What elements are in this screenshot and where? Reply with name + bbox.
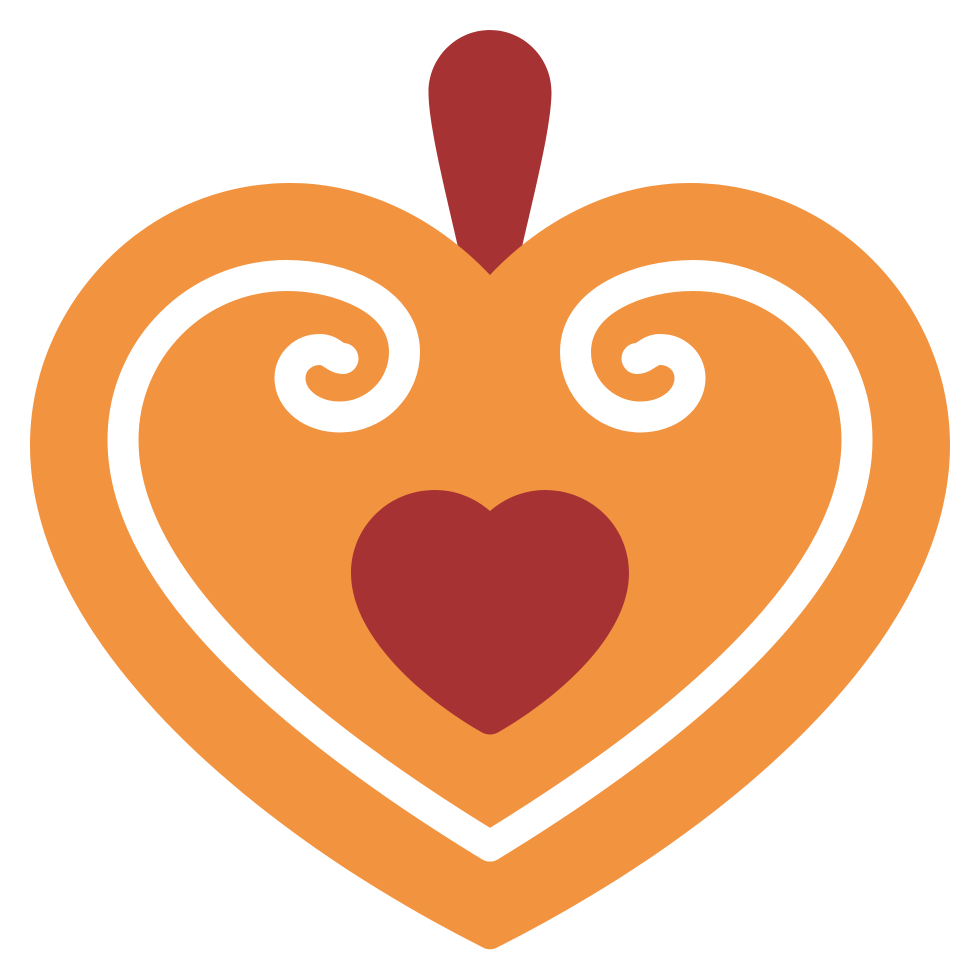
right icing line and swirl <box>490 276 857 846</box>
left icing line and swirl <box>123 276 490 846</box>
icon: red centre heart <box>351 490 629 734</box>
icon: red top drop <box>428 30 552 280</box>
icon: orange outer heart <box>30 183 950 949</box>
icon: white icing outline with swirls <box>123 276 857 846</box>
